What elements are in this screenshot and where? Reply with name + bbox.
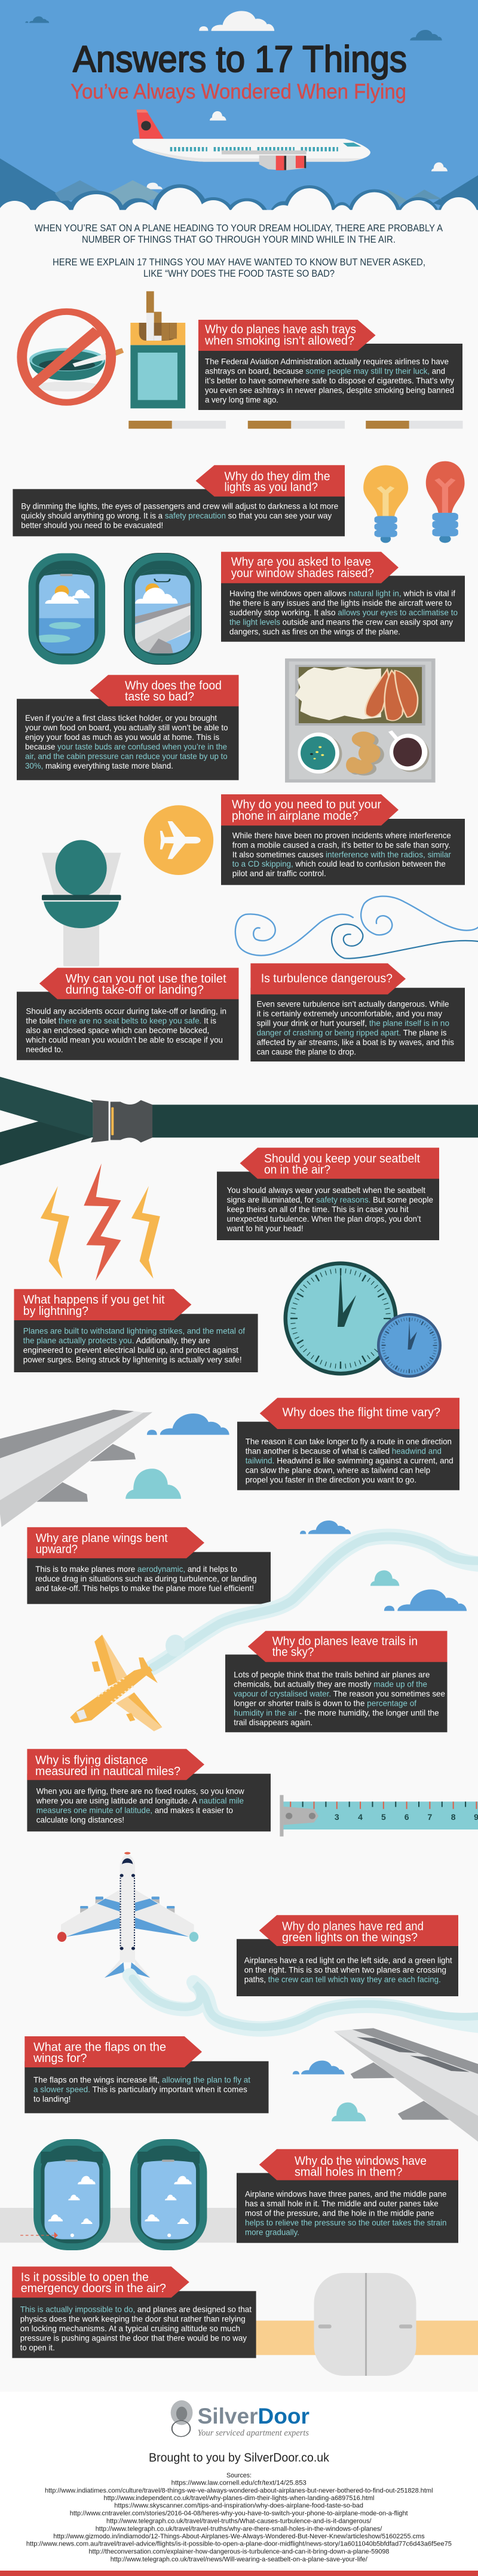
- body text: humidity in the air - the more humidity, the longer until the: [234, 1708, 439, 1718]
- icon: right window: [130, 2139, 207, 2250]
- heading: [282, 1920, 424, 1944]
- body text: spill your drink or hurt yourself, the plane itself is in no: [257, 1018, 449, 1027]
- panel: turbulence: [250, 963, 465, 1061]
- icon: left window: [33, 2139, 111, 2250]
- body text: to landing!: [33, 2094, 71, 2103]
- bottom red bar: [0, 2571, 478, 2576]
- heading: [295, 2155, 427, 2179]
- hero header: [0, 0, 478, 210]
- heading: Why are you asked to leave: [231, 556, 371, 569]
- body text: dangers, such as fires on the wings of the plane.: [229, 626, 400, 636]
- panel: food taste: [17, 675, 239, 780]
- heading: wings for?: [33, 2052, 87, 2065]
- body text: Having the windows open allows natural light in, which is vital if: [229, 588, 455, 598]
- sources: http://www.gizmodo.in/indiamodo/12-Things-About-Airplanes-We-Always-Wondered-But-Never-Knew/articleshow/51602255.cms: [53, 2533, 425, 2540]
- body text: [232, 830, 451, 878]
- panel: flaps: [24, 2036, 269, 2113]
- heading: measured in nautical miles?: [35, 1765, 180, 1778]
- body text: your own food on board, you actually still won’t be able to: [25, 723, 228, 732]
- icon: airplane mode: [144, 805, 213, 875]
- body text: most of the pressure, and the hole in the middle pane: [245, 2208, 434, 2217]
- heading: What happens if you get hit: [23, 1293, 165, 1307]
- heading: [66, 972, 226, 997]
- body text: unexpected turbulence. When the plan drops, you don’t: [227, 1214, 421, 1223]
- sources: https://www.skyscanner.com/tips-and-inspiration/why-does-airplane-food-taste-so-bad: [114, 2502, 363, 2510]
- body text: physics does the work keeping the door shut rather than relying: [20, 2314, 246, 2324]
- sources: http://www.telegraph.co.uk/travel/travel-truths/why-are-there-small-holes-in-the-windows-of-planes/: [96, 2525, 382, 2532]
- croissant: [348, 733, 384, 776]
- body text: This is to make planes more aerodynamic, and it helps to: [35, 1564, 237, 1574]
- heading: Why do planes leave trails in: [272, 1635, 418, 1648]
- body text: helps to relieve the pressure so the outer takes the strain: [245, 2217, 446, 2227]
- cloud bank: [0, 184, 478, 216]
- body text: it’s better to have somewhere safe to dispose of cigarettes. That’s why: [205, 375, 454, 385]
- body text: Should any accidents occur during take-off or landing, in: [26, 1006, 226, 1016]
- heading: green lights on the wings?: [282, 1931, 418, 1944]
- heading: during take-off or landing?: [66, 984, 204, 997]
- ruler numbers: [335, 1812, 478, 1822]
- body text: Even severe turbulence isn’t actually dangerous. While: [257, 999, 449, 1008]
- illustration: seatbelt and lightning: [0, 1077, 478, 1281]
- heading: your window shades raised?: [231, 567, 374, 580]
- intro text: LIKE “WHY DOES THE FOOD TASTE SO BAD?: [143, 268, 335, 279]
- grey band behind windows: [0, 2208, 237, 2242]
- intro text: [35, 222, 443, 279]
- heading: small holes in them?: [295, 2166, 403, 2179]
- heading: Why can you not use the toilet: [66, 972, 226, 986]
- body text: When you are flying, there are no fixed routes, so you know: [36, 1786, 245, 1796]
- body text: reduce drag in situations such as during turbulence, or landing: [35, 1574, 257, 1583]
- illustration: wing and clouds: [0, 1410, 229, 1527]
- heading: [272, 1635, 418, 1659]
- illustration: toilet: [42, 840, 121, 966]
- heading: [35, 1754, 180, 1778]
- panel: toilet: [17, 968, 239, 1060]
- panel: lightning: [14, 1289, 258, 1372]
- body text: a slower speed. This is particularly important when it comes: [33, 2084, 247, 2094]
- body text: chemicals, but actually they are mostly made up of the: [234, 1679, 427, 1689]
- ruler numbers: 4: [358, 1812, 363, 1822]
- heading: Why are plane wings bent: [36, 1532, 168, 1545]
- icon: cigarette pack: [130, 291, 185, 408]
- coffee cup: [390, 731, 429, 772]
- ruler numbers: 5: [381, 1812, 386, 1822]
- panel: contrails: [225, 1631, 447, 1732]
- body text: pressure is pushing against the door that there would be no way: [20, 2333, 247, 2343]
- panel: seatbelt: [217, 1148, 439, 1240]
- sources: Sources:: [226, 2472, 252, 2479]
- logo tagline: Your serviced apartment experts: [198, 2428, 309, 2438]
- body text: [36, 1786, 245, 1825]
- body text: You should always wear your seatbelt when the seatbelt: [227, 1185, 425, 1195]
- sources: http://www.independent.co.uk/travel/why-planes-dim-their-lights-when-landing-a6897516.html: [104, 2495, 374, 2502]
- body text: needed to.: [26, 1045, 63, 1054]
- cigarette progress bars: [128, 421, 462, 429]
- sources: http://www.news.com.au/travel/travel-advice/flights/is-it-possible-to-open-a-plane-door-midflight/news-story/1a6011040b5bfdfad77c6d43a6f5ee75: [26, 2541, 452, 2548]
- meat slices: [366, 669, 418, 721]
- cloud: teal: [332, 2103, 366, 2121]
- body text: calculate long distances!: [36, 1815, 124, 1825]
- body text: power surges. Being struck by lightening is actually very safe!: [23, 1355, 242, 1365]
- body text: By dimming the lights, the eyes of passengers and crew will adjust to darkness a lot more: [21, 501, 338, 511]
- heading: Why do the windows have: [295, 2155, 427, 2168]
- body text: [21, 501, 338, 530]
- sources: http://www.telegraph.co.uk/travel/travel-truths/What-causes-turbulence-and-is-it-dangerous/: [106, 2517, 372, 2525]
- mountains: [0, 158, 478, 215]
- body text: [229, 588, 458, 636]
- body text: [25, 713, 228, 770]
- body text: has a small hole in it. The middle and outer panes take: [245, 2198, 439, 2208]
- icon: large clock: [283, 1261, 398, 1376]
- body text: better should you need to be evacuated!: [21, 521, 163, 530]
- arrow: dashed: [20, 2232, 58, 2239]
- icon: lion door knocker: [171, 2400, 192, 2437]
- body text: The Federal Aviation Administration actually requires airlines to have: [205, 356, 449, 366]
- illustration: turbulence wind swirls: [235, 897, 478, 959]
- body text: enjoy your food as much as you would at home. This is: [25, 732, 219, 742]
- icon: ash tray: [29, 348, 124, 391]
- panel: flight time: [237, 1398, 459, 1490]
- footer: [0, 2392, 478, 2576]
- icon: window with wing view: [124, 553, 201, 665]
- logo wordmark: SilverDoor: [198, 2404, 310, 2428]
- panel: emergency doors: [12, 2266, 256, 2358]
- heading: lights as you land?: [225, 481, 318, 494]
- heading: Is it possible to open the: [21, 2271, 149, 2284]
- body text: to open it.: [20, 2343, 55, 2352]
- cloud: teal: [125, 1468, 181, 1499]
- intro text: NUMBER OF THINGS THAT GO THROUGH YOUR MIND WHILE IN THE AIR.: [82, 234, 396, 245]
- body text: a very long time ago.: [205, 394, 278, 404]
- ruler numbers: 3: [335, 1812, 339, 1822]
- ruler numbers: 8: [451, 1812, 456, 1822]
- sources: https://www.law.cornell.edu/cfr/text/14/25.853: [171, 2480, 307, 2487]
- body text: 30%, making everything taste more bland.: [25, 761, 173, 770]
- body text: [20, 2305, 252, 2352]
- body text: [23, 1326, 245, 1365]
- heading: Why is flying distance: [35, 1754, 148, 1767]
- body text: This is actually impossible to do, and planes are designed so that: [20, 2305, 252, 2314]
- body text: [33, 2075, 250, 2103]
- body text: the light levels outside and means the crew can easily spot any: [229, 617, 453, 626]
- heading: when smoking isn’t allowed?: [204, 335, 354, 348]
- cloud: blue: [147, 1414, 229, 1435]
- body text: [257, 999, 454, 1056]
- logo: [171, 2400, 310, 2438]
- heading: taste so bad?: [125, 690, 194, 703]
- soup bowl: [298, 733, 342, 773]
- heading: emergency doors in the air?: [21, 2282, 166, 2295]
- icon: yellow bulb: [363, 465, 408, 543]
- heading: Should you keep your seatbelt: [264, 1152, 420, 1165]
- body text: The reason it can take longer to fly a route in one direction: [246, 1437, 452, 1446]
- sources: http://www.telegraph.co.uk/travel/news/Will-wearing-a-seatbelt-on-a-plane-save-your-life/: [111, 2556, 368, 2563]
- body text: Planes are built to withstand lightning strikes, and the metal of: [23, 1326, 245, 1336]
- heading: [225, 470, 330, 494]
- illustration: food tray and plane icon: [144, 659, 436, 875]
- clouds: [300, 1520, 467, 1611]
- panel: airplane mode: [221, 794, 465, 885]
- heading: What are the flaps on the: [33, 2041, 166, 2054]
- contrail: [130, 1975, 478, 2029]
- body text: danger of crashing or being ripped apart. The plane is: [257, 1027, 447, 1037]
- heading: Why does the food: [125, 679, 222, 692]
- panel: nautical miles: [27, 1749, 271, 1831]
- airplane: [133, 109, 370, 170]
- icon: seatbelt: [0, 1077, 478, 1165]
- illustration: contrail, clouds and orange plane: [70, 1520, 478, 1731]
- sources: http://www.cntraveler.com/stories/2016-04-08/heres-why-you-have-to-switch-your-phone-to-airplane-mode-on-a-flight: [70, 2510, 408, 2517]
- illustration: light bulbs and windows: [28, 461, 465, 665]
- body text: pilot and air traffic control.: [232, 868, 326, 878]
- body text: the there is any issues and the lights inside the aircraft were to: [229, 598, 452, 607]
- sources: http://www.indiatimes.com/culture/travel/8-things-we-ve-always-wondered-about-airplanes-but-never-bothered-to-find-out-251828.html: [45, 2487, 433, 2494]
- heading: [264, 1152, 420, 1176]
- heading: [231, 556, 374, 580]
- body text: While there have been no proven incidents where interference: [232, 830, 451, 840]
- title: Answers to 17 Things: [73, 39, 407, 80]
- heading: by lightning?: [23, 1305, 88, 1318]
- heading: Why does the flight time vary?: [282, 1406, 440, 1419]
- brought to you by: Brought to you by SilverDoor.co.uk: [149, 2451, 330, 2464]
- heading: [36, 1532, 168, 1556]
- body text: It also sometimes causes interference with the radios, similar: [232, 849, 451, 859]
- icon: wing: [0, 1410, 152, 1527]
- ruler numbers: 6: [405, 1812, 409, 1822]
- body text: can cause the plane to drop.: [257, 1047, 356, 1056]
- body text: [245, 2189, 447, 2237]
- body text: vapour of crystalised water. The reason you sometimes see: [234, 1689, 445, 1699]
- heading: [204, 323, 356, 348]
- panel: dim lights: [13, 465, 345, 536]
- sources: [26, 2472, 452, 2563]
- heading: Why do planes have red and: [282, 1920, 424, 1933]
- body text: affected by air streams, like a boat is by waves, and this: [257, 1037, 454, 1047]
- body text: ashtrays on board, because some people may still try their luck, and: [205, 366, 445, 375]
- panel: window shades: [221, 552, 465, 642]
- icon: lightning bolts: [41, 1164, 160, 1281]
- panel: wing lights: [237, 1915, 458, 1996]
- heading: [23, 1293, 165, 1318]
- heading: [125, 679, 222, 703]
- body text: Even if you’re a first class ticket holder, or you brought: [25, 713, 217, 723]
- body text: on locking mechanisms. At a typical cruising altitude so much: [20, 2324, 240, 2333]
- subtitle: You’ve Always Wondered When Flying: [71, 80, 406, 103]
- body text: [35, 1564, 257, 1593]
- icon: window with sea view: [28, 553, 105, 665]
- body text: tailwind. Headwind is like swimming against a current, and: [246, 1456, 454, 1466]
- body text: [234, 1670, 445, 1727]
- body text: more gradually.: [245, 2227, 299, 2237]
- illustration: emergency door: [256, 2273, 478, 2376]
- body text: [246, 1437, 454, 1485]
- body text: Airplane windows have three panes, and the middle pane: [245, 2189, 447, 2198]
- body text: The flaps on the wings increase lift, allowing the plan to fly at: [33, 2075, 250, 2084]
- intro text: HERE WE EXPLAIN 17 THINGS YOU MAY HAVE WANTED TO KNOW BUT NEVER ASKED,: [53, 256, 425, 268]
- body text: [226, 1185, 433, 1233]
- heading: on in the air?: [264, 1163, 330, 1176]
- body text: also an enclosed space which can become blocked,: [26, 1026, 209, 1035]
- heading: [33, 2041, 166, 2065]
- illustration: windows with small holes: [20, 2139, 207, 2250]
- body text: because your taste buds are confused when you’re in the: [25, 742, 227, 751]
- body text: the toilet there are no seat belts to keep you safe. It is: [26, 1016, 216, 1026]
- small clouds: [25, 11, 448, 189]
- body text: on the right. This is so that when two planes are crossing: [244, 1965, 446, 1975]
- heading: Why do they dim the: [225, 470, 330, 483]
- icon: red bulb: [426, 461, 465, 543]
- body text: paths, the crew can tell which way they are each facing.: [244, 1975, 441, 1984]
- heading: Is turbulence dangerous?: [261, 972, 393, 985]
- body text: where you are using latitude and longitude. A nautical mile: [36, 1796, 244, 1806]
- illustration: ash tray and cigarettes: [22, 291, 462, 429]
- icon: small clock: [377, 1313, 442, 1378]
- body text: longer or shorter trails is down to the percentage of: [234, 1699, 416, 1708]
- icon: no smoking sign: [22, 311, 111, 402]
- body text: it is certainly extremely uncomfortable, and you may: [257, 1008, 442, 1018]
- heading: [21, 2271, 166, 2295]
- body text: Airplanes have a red light on the left side, and a green light: [244, 1956, 452, 1965]
- panel: window holes: [237, 2149, 458, 2243]
- body text: [25, 1006, 226, 1054]
- panel: bent wings: [27, 1527, 271, 1604]
- rice: [295, 667, 381, 720]
- sources: http://theconversation.com/explainer-how-dangerous-is-turbulence-and-can-it-bring-down-a-plane-59098: [88, 2549, 390, 2556]
- body text: engineered to prevent electrical build up, and protect against: [23, 1345, 238, 1355]
- body text: to a CD skipping, which could lead to confusion between the: [232, 859, 446, 868]
- heading: upward?: [36, 1543, 78, 1556]
- icon: orange plane: [70, 1635, 162, 1731]
- body text: Lots of people think that the trails behind air planes are: [234, 1670, 430, 1679]
- body text: air, and the cabin pressure can reduce your taste by up to: [25, 751, 228, 761]
- body text: [244, 1956, 452, 1984]
- illustration: ruler and top-down plane: [57, 1795, 478, 1978]
- illustration: contrail and flap wing: [130, 1975, 478, 2141]
- heading: the sky?: [272, 1646, 314, 1659]
- hero illustration: [0, 11, 478, 243]
- cloud: blue: [293, 2061, 345, 2075]
- body text: propel you faster in the direction you want to go.: [246, 1475, 416, 1485]
- icon: wing with flaps: [334, 2028, 478, 2141]
- panel: ash trays: [198, 320, 462, 410]
- body text: from a mobile caused a crash, it’s better to be safe than sorry.: [232, 840, 451, 849]
- body text: keep theirs on all of the time. This is in case you hit: [227, 1204, 409, 1214]
- body text: you even see ashtrays in newer planes, despite smoking being banned: [205, 385, 454, 394]
- body text: [205, 356, 454, 404]
- body text: want to hit your head!: [226, 1223, 304, 1233]
- body text: trail disappears again.: [234, 1718, 312, 1727]
- body text: signs are illuminated, for safety reasons. But some people: [227, 1195, 433, 1204]
- icon: tape measure: [280, 1795, 478, 1837]
- heading: Why do you need to put your: [232, 799, 381, 812]
- body text: and take-off. This helps to make the plane more fuel efficient!: [35, 1583, 254, 1593]
- heading: Why do planes have ash trays: [205, 323, 356, 336]
- body text: suddenly stop working. It also allows your eyes to acclimatise to: [229, 607, 458, 617]
- icon: meal tray: [285, 659, 436, 782]
- icon: top-down plane: [57, 1852, 198, 1978]
- body text: can slow the plane down, where as tailwind can help: [246, 1466, 430, 1475]
- heading: phone in airplane mode?: [232, 810, 358, 823]
- body text: than another is because of what is called headwind and: [246, 1446, 442, 1456]
- heading: [232, 799, 381, 823]
- body text: the plane actually protects you. Additionally, they are: [23, 1336, 210, 1345]
- body text: which could mean you wouldn’t be able to escape if you: [25, 1035, 223, 1045]
- contrail: [152, 1537, 478, 1668]
- body text: measures one minute of latitude, and makes it easier to: [36, 1806, 233, 1815]
- body text: quickly should anything go wrong. It is a safety precaution so that you can see your way: [21, 511, 332, 521]
- ruler numbers: 7: [428, 1812, 433, 1822]
